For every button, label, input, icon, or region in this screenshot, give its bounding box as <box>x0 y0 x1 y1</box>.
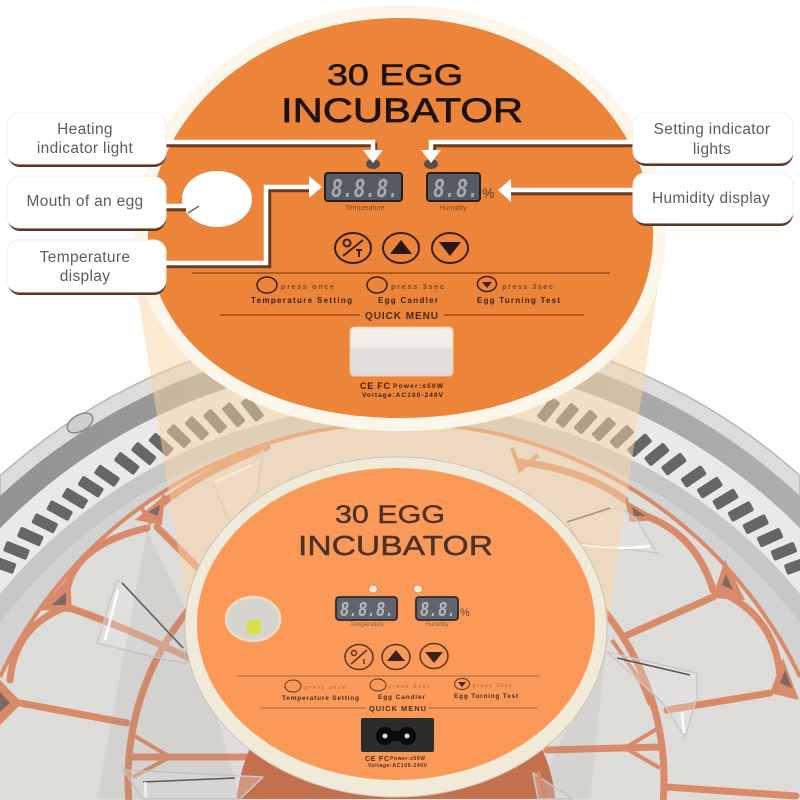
legend: egg candler <box>370 679 430 701</box>
humidity display: % <box>460 607 470 619</box>
certification text: Power:≤50W <box>390 756 425 762</box>
callout: humidity display <box>633 173 793 226</box>
enlarged control panel disc <box>148 18 653 418</box>
title: INCUBATOR <box>281 92 523 130</box>
control buttons <box>345 644 448 670</box>
certification text: Voltage:AC100-240V <box>362 392 444 399</box>
callout: heating indicator light: indicator light <box>37 140 134 157</box>
temperature display <box>336 597 397 628</box>
certification text: Power:≤50W <box>393 383 444 390</box>
callout: mouth of an egg <box>7 177 166 231</box>
callout: setting indicator lights: Setting indicator <box>654 121 770 138</box>
translucent magnifier beam <box>129 240 665 625</box>
legend: egg candler: Egg Candler <box>378 694 425 701</box>
power socket <box>361 718 434 752</box>
orange egg tray frame <box>0 423 800 799</box>
legend: temperature setting: press once <box>305 685 345 691</box>
clear egg turner: bottom right <box>533 772 573 799</box>
icon: rim screw <box>64 409 96 437</box>
power socket window <box>350 327 453 376</box>
temperature display: 8.8.8. <box>340 600 394 623</box>
physical control panel disc <box>185 457 607 797</box>
clear egg turner: upper right <box>567 507 657 553</box>
callout: temperature display <box>7 240 166 295</box>
legend: temperature setting: Temperature Setting <box>282 695 359 702</box>
callout: heating indicator light <box>7 113 166 167</box>
humidity display: Humidity <box>425 622 449 628</box>
disc face <box>197 468 595 780</box>
legend: egg turning test: press 3sec <box>473 683 512 689</box>
legend: egg candler: press 3sec <box>391 282 444 291</box>
legend: egg candler: press 3sec <box>388 684 430 690</box>
legend: temperature setting <box>251 277 352 305</box>
clear egg turner: left <box>97 580 187 663</box>
certification text: CE FC <box>365 756 389 763</box>
arrow: humidity display <box>498 179 633 202</box>
callout: temperature display: display <box>60 268 110 285</box>
temperature display <box>325 173 402 212</box>
title <box>298 501 493 561</box>
title: 30 EGG <box>335 501 445 529</box>
humidity display: % <box>482 185 494 201</box>
legend: egg turning test: Egg Turning Test <box>477 296 560 305</box>
humidity display: Humidity <box>439 205 467 212</box>
disc body <box>148 18 653 418</box>
control buttons <box>335 233 468 263</box>
humidity display <box>416 597 470 628</box>
legend: temperature setting <box>282 680 359 702</box>
drum vent slots <box>0 396 800 575</box>
legend: temperature setting: press once <box>281 282 334 291</box>
certification text: CE FC <box>360 381 390 391</box>
indicator lights <box>366 159 438 169</box>
callout: heating indicator light: Heating <box>57 121 113 138</box>
arrow: mouth of an egg <box>166 206 199 213</box>
certification text <box>360 381 444 399</box>
humidity display <box>427 173 494 212</box>
divider line <box>237 675 540 677</box>
legend: egg turning test <box>454 678 519 700</box>
indicator lights <box>368 585 422 593</box>
divider line <box>192 272 610 274</box>
quick menu heading: QUICK MENU <box>365 311 438 322</box>
title: INCUBATOR <box>298 530 493 561</box>
temperature display: Temperature <box>350 622 385 628</box>
callout: humidity display: Humidity display <box>652 190 770 207</box>
callout: setting indicator lights <box>633 113 793 166</box>
title <box>281 59 523 130</box>
legend: egg candler: Egg Candler <box>378 296 438 305</box>
arrow: heating indicator <box>166 142 383 163</box>
legend: temperature setting: Temperature Setting <box>251 296 352 305</box>
tray truss joints <box>0 495 799 725</box>
soft lower light shafts <box>97 530 607 799</box>
arrow: setting indicator <box>421 142 633 163</box>
certification text <box>365 756 428 769</box>
temperature display: Temperature <box>345 205 385 212</box>
callout: mouth of an egg: Mouth of an egg <box>27 193 143 210</box>
clear egg turner: lower right <box>607 652 697 737</box>
callout: temperature display: Temperature <box>40 249 130 266</box>
legend: egg candler <box>367 277 444 305</box>
clear egg turner: bottom left <box>123 770 263 799</box>
legend: egg turning test: press 3sec <box>502 282 553 291</box>
egg mouth opening <box>182 171 252 227</box>
humidity display: 8.8. <box>420 600 456 623</box>
title: 30 EGG <box>327 59 463 92</box>
central tray hub <box>237 654 555 799</box>
temperature display: 8.8.8. <box>331 176 399 206</box>
legend: egg turning test <box>477 276 560 305</box>
arrow: temperature display <box>166 176 322 266</box>
certification text: Voltage:AC100-240V <box>368 763 428 769</box>
humidity display: 8.8. <box>433 176 479 206</box>
disc rim <box>185 457 607 797</box>
incubator drum body <box>0 323 800 800</box>
quick menu heading: QUICK MENU <box>369 704 426 713</box>
callout: setting indicator lights: lights <box>693 141 731 158</box>
egg candler lamp <box>226 597 280 641</box>
legend: egg turning test: Egg Turning Test <box>454 693 519 700</box>
clear egg turner: upper left <box>213 450 263 523</box>
